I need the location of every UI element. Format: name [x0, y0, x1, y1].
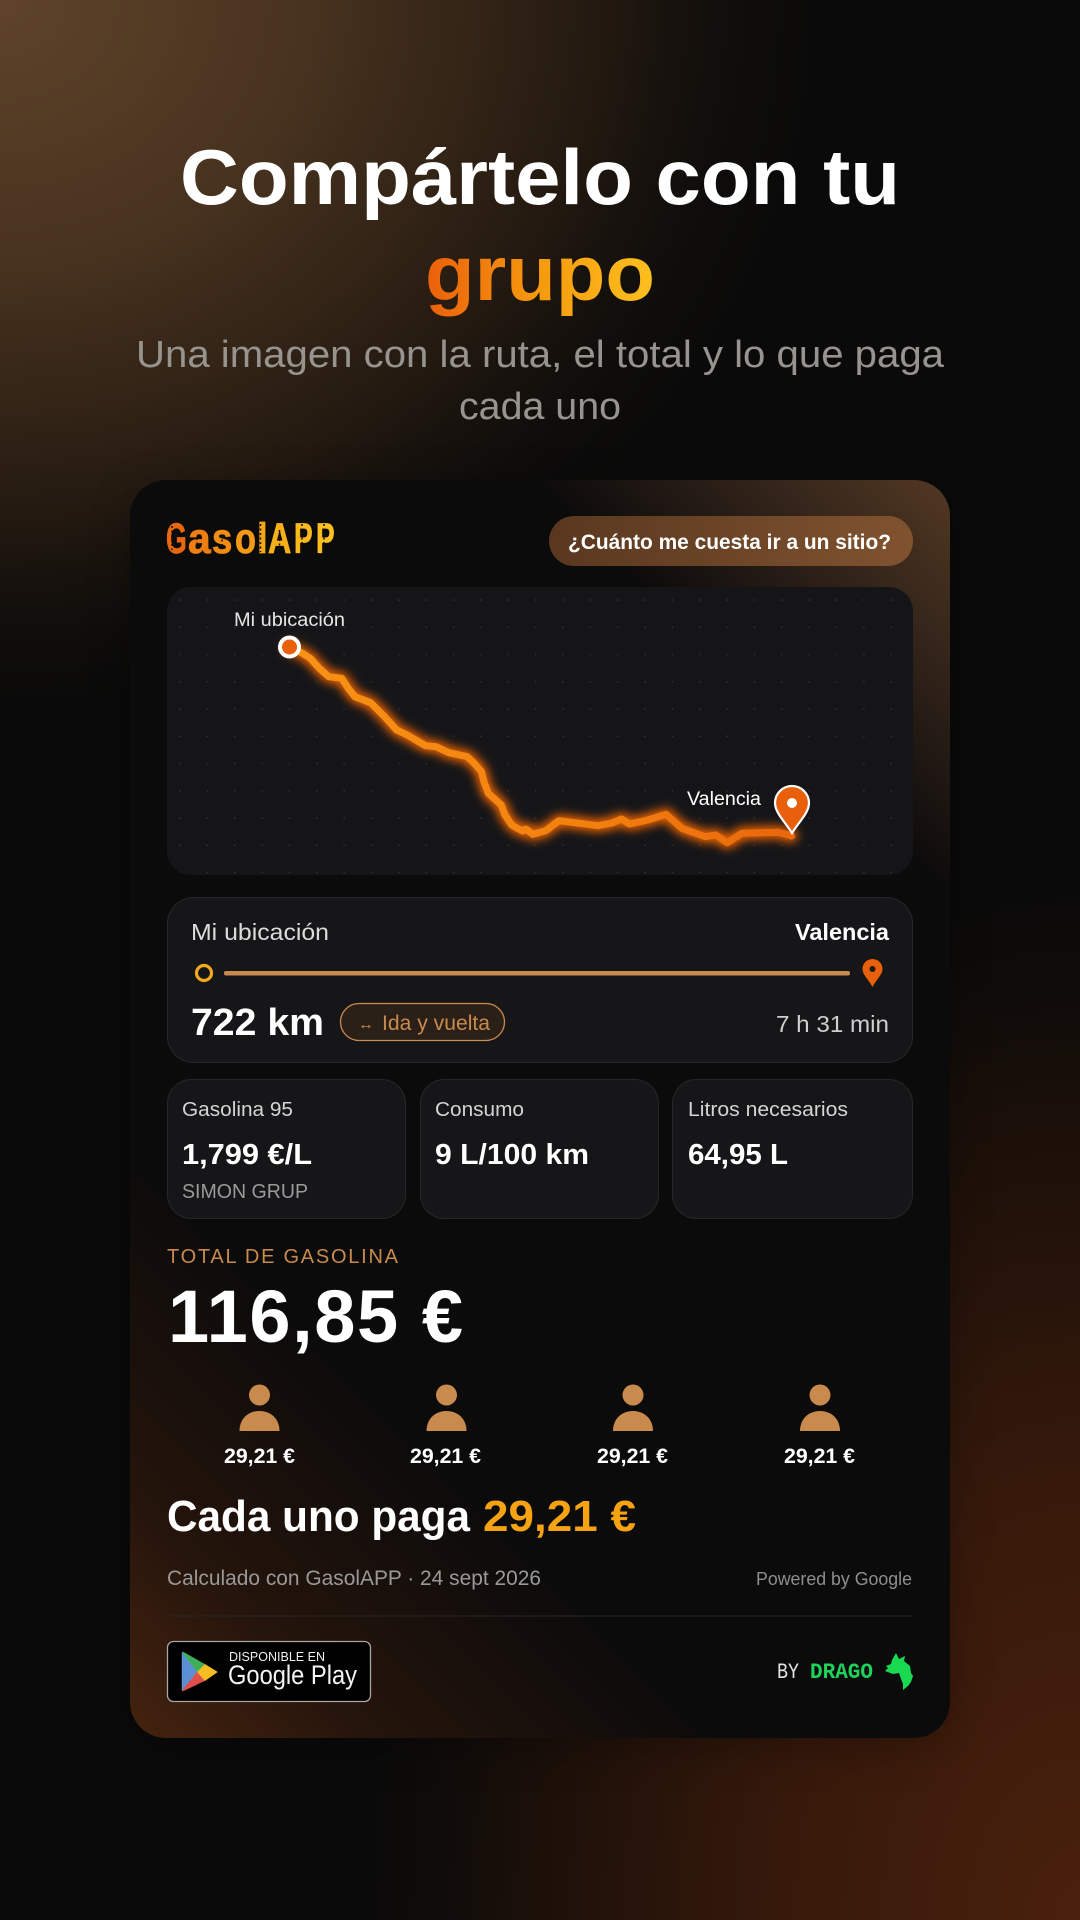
title: grupo [425, 229, 655, 317]
stat card: fuel: 1,799 €/L [182, 1139, 312, 1171]
stat card: liters [672, 1080, 912, 1218]
person 1 [224, 1384, 295, 1468]
total label: TOTAL DE GASOLINA [167, 1246, 399, 1268]
per person headline: Cada uno paga [167, 1492, 471, 1541]
title [180, 133, 900, 317]
destination pin small [862, 959, 882, 987]
icon: play logo [182, 1652, 216, 1690]
person 2 [410, 1384, 481, 1468]
person 2: 29,21 € [410, 1445, 481, 1468]
Google Play badge: Google Play [228, 1660, 357, 1690]
stat card: fuel: SIMON GRUP [182, 1181, 308, 1203]
round trip chip: ↔ [358, 1016, 374, 1033]
by drago brand: BY [777, 1660, 799, 1685]
panel: share card [130, 480, 950, 1738]
logo: GasolAPP: l [257, 514, 268, 562]
footnote: Calculado con GasolAPP · 24 sept 2026 [167, 1567, 541, 1590]
per person headline: 29,21 € [483, 1492, 636, 1541]
by drago brand: DRAGO [810, 1660, 873, 1685]
per person headline [167, 1492, 636, 1541]
logo: GasolAPP [166, 514, 335, 563]
tagline pill [549, 516, 913, 566]
stat card: consumption: 9 L/100 km [435, 1139, 589, 1171]
stat card: consumption: Consumo [435, 1099, 524, 1121]
person 4: 29,21 € [784, 1445, 855, 1468]
Google Play badge [168, 1642, 370, 1702]
logo: GasolAPP: P [316, 514, 335, 562]
subtitle [136, 334, 945, 428]
title: Compártelo con tu [180, 133, 900, 221]
person 1: 29,21 € [224, 1445, 295, 1468]
logo: GasolAPP: G [166, 515, 187, 563]
duration: 7 h 31 min [776, 1011, 889, 1037]
people split [224, 1384, 855, 1468]
stat card: liters: 64,95 L [688, 1139, 788, 1171]
subtitle: Una imagen con la ruta, el total y lo que paga [136, 334, 945, 376]
icon: dragon [885, 1653, 913, 1690]
logo: GasolAPP: a [188, 514, 211, 562]
subtitle: cada uno [459, 386, 621, 428]
route summary panel [168, 898, 912, 1062]
by drago brand [777, 1653, 913, 1690]
map panel [167, 587, 913, 875]
stat card: fuel [168, 1080, 406, 1218]
destination pin [775, 786, 809, 833]
powered by: Powered by Google [756, 1569, 912, 1589]
route line [290, 648, 792, 843]
person 3 [597, 1384, 668, 1468]
progress line [224, 971, 850, 976]
stat card: fuel: Gasolina 95 [182, 1099, 293, 1121]
logo: GasolAPP: P [294, 514, 313, 562]
distance: 722 km [191, 1002, 324, 1044]
logo: GasolAPP: o [235, 515, 256, 563]
person 3: 29,21 € [597, 1445, 668, 1468]
card shadow [130, 490, 950, 1748]
total amount: 116,85 € [168, 1275, 463, 1358]
origin label: Mi ubicación [234, 610, 345, 631]
origin name: Mi ubicación [191, 919, 329, 945]
stat card: consumption [420, 1080, 658, 1218]
origin ring [196, 966, 212, 980]
tagline pill: ¿Cuánto me cuesta ir a un sitio? [568, 531, 891, 554]
logo: GasolAPP: A [268, 516, 291, 563]
round trip chip: Ida y vuelta [382, 1012, 490, 1035]
Google Play badge: DISPONIBLE EN [229, 1650, 325, 1664]
person 4 [784, 1384, 855, 1468]
round trip chip [340, 1004, 504, 1040]
destination label: Valencia [687, 789, 761, 810]
stat card: liters: Litros necesarios [688, 1099, 848, 1121]
destination name: Valencia [795, 919, 889, 945]
origin marker [280, 638, 299, 656]
logo: GasolAPP: s [212, 515, 232, 563]
